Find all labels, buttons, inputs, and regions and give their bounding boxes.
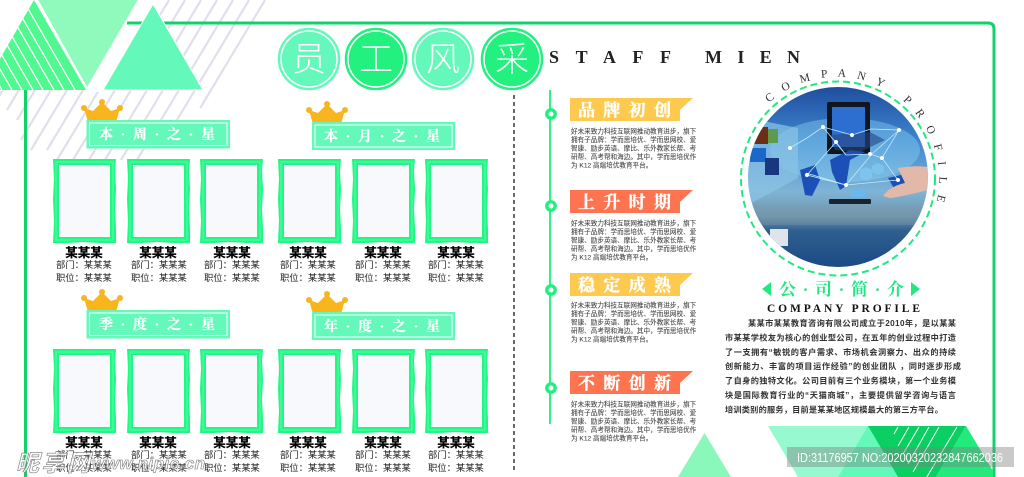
staff card row 2 col 6 [425, 349, 488, 473]
milestone banner: 品牌初创: 品牌初创 [578, 101, 671, 120]
milestone text 4: 研帮、高考帮和海边。其中，学而思培优作 [571, 425, 697, 434]
staff card row 1 col 1: 职位：某某某 [56, 272, 112, 283]
company description: 块是国际教育行业的“天猫商城”，主要提供留学咨询与语言 [725, 390, 956, 400]
section heading: 年度之星: 年·度·之·星 [324, 318, 440, 335]
photo: hexagons [860, 163, 884, 181]
staff card row 2 col 5 [352, 349, 415, 473]
white band between triangles [85, 0, 160, 92]
photo: network nodes [788, 125, 901, 187]
staff card row 1 col 4 [278, 159, 341, 283]
title circle: 员: 员 [292, 41, 326, 79]
title circle: 工 [346, 28, 406, 90]
milestone text 3: 拥有子品牌：学而思培优、学而思网校、爱 [571, 309, 697, 318]
title circle: 风: 风 [426, 41, 460, 79]
timeline node 1 [547, 110, 555, 118]
staff card row 2 col 2 [127, 349, 190, 473]
staff card row 1 col 2: 职位：某某某 [131, 272, 187, 283]
subtitle [549, 47, 800, 67]
company description: 创新能力、丰富的项目运作经验”的创业团队 ，同时逐步形成 [725, 361, 961, 371]
milestone text 1: 智康、励步英语、摩比、乐外教家长帮、考 [571, 144, 697, 152]
mint triangle [103, 4, 203, 90]
site watermark [16, 450, 205, 476]
milestone text 1 [571, 126, 697, 170]
milestone text 2: 为 K12 高端培优教育平台。 [571, 252, 652, 262]
subheading: COMPANY PROFILE [767, 303, 920, 315]
staff card row 2 col 5: 职位：某某某 [355, 462, 411, 473]
milestone text 1: 为 K12 高端培优教育平台。 [571, 160, 652, 170]
photo: tablet [827, 102, 870, 154]
staff card row 1 col 4: 职位：某某某 [280, 272, 336, 283]
title circle: 员 [278, 28, 340, 90]
site watermark: www.nipic.cn [92, 454, 205, 473]
milestone text 4: 智康、励步英语、摩比、乐外教家长帮、考 [571, 416, 697, 426]
milestone text 4: 为 K12 高端培优教育平台。 [571, 434, 652, 442]
section heading: 年度之星 [306, 291, 455, 340]
striped triangle [0, 0, 86, 90]
staff card row 1 col 1: 部门：某某某 [56, 259, 112, 270]
milestone text 2: 好未来致力科技互联网推动教育进步，旗下 [571, 218, 697, 228]
section heading: 本周之星: 本·周·之·星 [99, 126, 215, 143]
company description: 某某市某某教育咨询有限公司成立于2010年，是以某某 [748, 318, 956, 328]
staff card row 1 col 6: 职位：某某某 [428, 272, 484, 283]
photo: network lines [790, 127, 899, 185]
staff card row 1 col 6 [425, 159, 488, 283]
company description: 市某某学校友为核心的创业型公司，在五年的创业过程中打造 [725, 332, 957, 342]
staff card row 1 col 3: 部门：某某某 [204, 259, 260, 270]
section heading: 本周之星 [81, 99, 230, 148]
staff card row 2 col 3: 部门：某某某 [204, 449, 260, 460]
bottom right triangles [768, 426, 993, 477]
staff card row 1 col 2: 某某某 [139, 245, 177, 260]
staff card row 2 col 1: 部门：某某某 [56, 449, 112, 460]
company photo circle [748, 87, 928, 267]
light green inverted triangle [36, 0, 140, 89]
staff card row 1 col 1: 某某某 [65, 245, 103, 260]
heading: 公司简介: 公·司·简·介 [779, 279, 904, 299]
milestone text 1: 拥有子品牌：学而思培优、学而思网校、爱 [571, 135, 697, 144]
staff card row 2 col 1: 某某某 [65, 435, 103, 450]
staff card row 2 col 2: 部门：某某某 [131, 449, 187, 460]
staff card row 2 col 3 [200, 349, 263, 473]
staff card row 2 col 5: 某某某 [364, 435, 402, 450]
staff card row 2 col 2: 职位：某某某 [131, 462, 187, 473]
milestone banner: 稳定成熟 [570, 273, 693, 296]
company description: 了自身的独特文化。公司目前有三个业务模块，第一个业务模 [725, 376, 957, 386]
background diagonal stripes [0, 0, 265, 160]
staff card row 2 col 6: 职位：某某某 [428, 462, 484, 473]
photo: hand [883, 166, 928, 198]
site watermark: 昵享网 [16, 450, 93, 476]
staff card row 2 col 1: 职位：某某某 [56, 462, 112, 473]
staff card row 1 col 3: 职位：某某某 [204, 272, 260, 283]
title circle: 工: 工 [359, 41, 393, 79]
timeline node 4 [547, 384, 555, 392]
milestone banner: 品牌初创 [570, 98, 693, 121]
curved caption: COMPANY PROFILE [766, 69, 947, 202]
subtitle: STAFF [549, 47, 671, 67]
staff card row 2 col 6: 某某某 [437, 435, 475, 450]
milestone text 2: 拥有子品牌：学而思培优、学而思网校、爱 [571, 227, 697, 236]
milestone text 3 [571, 300, 697, 344]
staff card row 2 col 4: 部门：某某某 [280, 449, 336, 460]
title circle: 采 [482, 28, 542, 90]
section heading: 季度之星: 季·度·之·星 [99, 316, 215, 333]
milestone banner: 不断创新 [570, 371, 693, 394]
company description [725, 318, 961, 414]
staff card row 1 col 4: 某某某 [289, 245, 327, 260]
staff card row 2 col 2: 某某某 [139, 435, 177, 450]
staff card row 1 col 5: 某某某 [364, 245, 402, 260]
staff card row 1 col 1 [53, 159, 116, 283]
milestone banner: 上升时期 [570, 190, 693, 213]
section heading: 本月之星: 本·月·之·星 [324, 128, 440, 145]
milestone text 4: 好未来致力科技互联网推动教育进步，旗下 [571, 400, 697, 408]
subtitle: MIEN [705, 47, 800, 67]
staff card row 1 col 5: 部门：某某某 [355, 259, 411, 270]
staff card row 2 col 3: 职位：某某某 [204, 462, 260, 473]
company description: 培训类别的服务，目前是某某地区规模最大的第三方平台。 [725, 404, 943, 414]
photo: left media panel [748, 118, 798, 205]
timeline [547, 90, 555, 424]
staff card row 1 col 6: 部门：某某某 [428, 259, 484, 270]
milestone text 2 [571, 218, 697, 262]
title circle: 风 [412, 28, 474, 90]
photo: phone [829, 199, 871, 204]
milestone banner: 上升时期: 上升时期 [578, 193, 671, 212]
milestone text 4 [571, 400, 697, 442]
photo: city haze [748, 205, 928, 225]
staff card row 1 col 3: 某某某 [213, 245, 251, 260]
staff card row 2 col 6: 部门：某某某 [428, 449, 484, 460]
timeline node 2 [547, 202, 555, 210]
section heading: 本月之星 [306, 101, 455, 150]
photo: small badge [770, 229, 788, 246]
timeline node 3 [547, 286, 555, 294]
staff card row 1 col 2 [127, 159, 190, 283]
staff card row 2 col 1 [53, 349, 116, 473]
dashed ring [741, 82, 935, 276]
staff card row 2 col 3: 某某某 [213, 435, 251, 450]
staff card row 1 col 5 [352, 159, 415, 283]
bottom centre triangle [678, 433, 731, 477]
staff card row 1 col 5: 职位：某某某 [355, 272, 411, 283]
milestone banner: 稳定成熟: 稳定成熟 [578, 275, 672, 295]
staff card row 2 col 5: 部门：某某某 [355, 449, 411, 460]
staff card row 1 col 3 [200, 159, 263, 283]
milestone text 2: 智康、励步英语、摩比、乐外教家长帮、考 [571, 236, 697, 244]
milestone text 3: 智康、励步英语、摩比、乐外教家长帮、考 [571, 318, 697, 326]
title circle: 采: 采 [495, 41, 529, 79]
section heading: 季度之星 [81, 289, 230, 338]
staff card row 1 col 4: 部门：某某某 [280, 259, 336, 270]
staff card row 2 col 4 [278, 349, 341, 473]
staff card row 2 col 4: 某某某 [289, 435, 327, 450]
photo: cyan glow band [770, 118, 920, 182]
staff card row 2 col 4: 职位：某某某 [280, 462, 336, 473]
milestone text 4: 拥有子品牌：学而思培优、学而思网校、爱 [571, 408, 697, 417]
image ID watermark [787, 447, 1014, 467]
milestone text 1: 研帮、高考帮和海边。其中，学而思培优作 [571, 152, 697, 161]
staff card row 1 col 2: 部门：某某某 [131, 259, 187, 270]
milestone banner: 不断创新: 不断创新 [578, 373, 671, 393]
staff card row 1 col 6: 某某某 [437, 245, 475, 260]
milestone text 3: 研帮、高考帮和海边。其中，学而思培优作 [571, 326, 697, 335]
milestone text 3: 为 K12 高端培优教育平台。 [571, 334, 652, 344]
milestone text 1: 好未来致力科技互联网推动教育进步，旗下 [571, 126, 697, 136]
milestone text 2: 研帮、高考帮和海边。其中，学而思培优作 [571, 244, 697, 253]
photo: world map [800, 150, 908, 196]
company description: 了一支拥有“敏锐的客户需求、市场机会洞察力、出众的持续 [725, 347, 956, 357]
milestone text 3: 好未来致力科技互联网推动教育进步，旗下 [571, 300, 697, 310]
